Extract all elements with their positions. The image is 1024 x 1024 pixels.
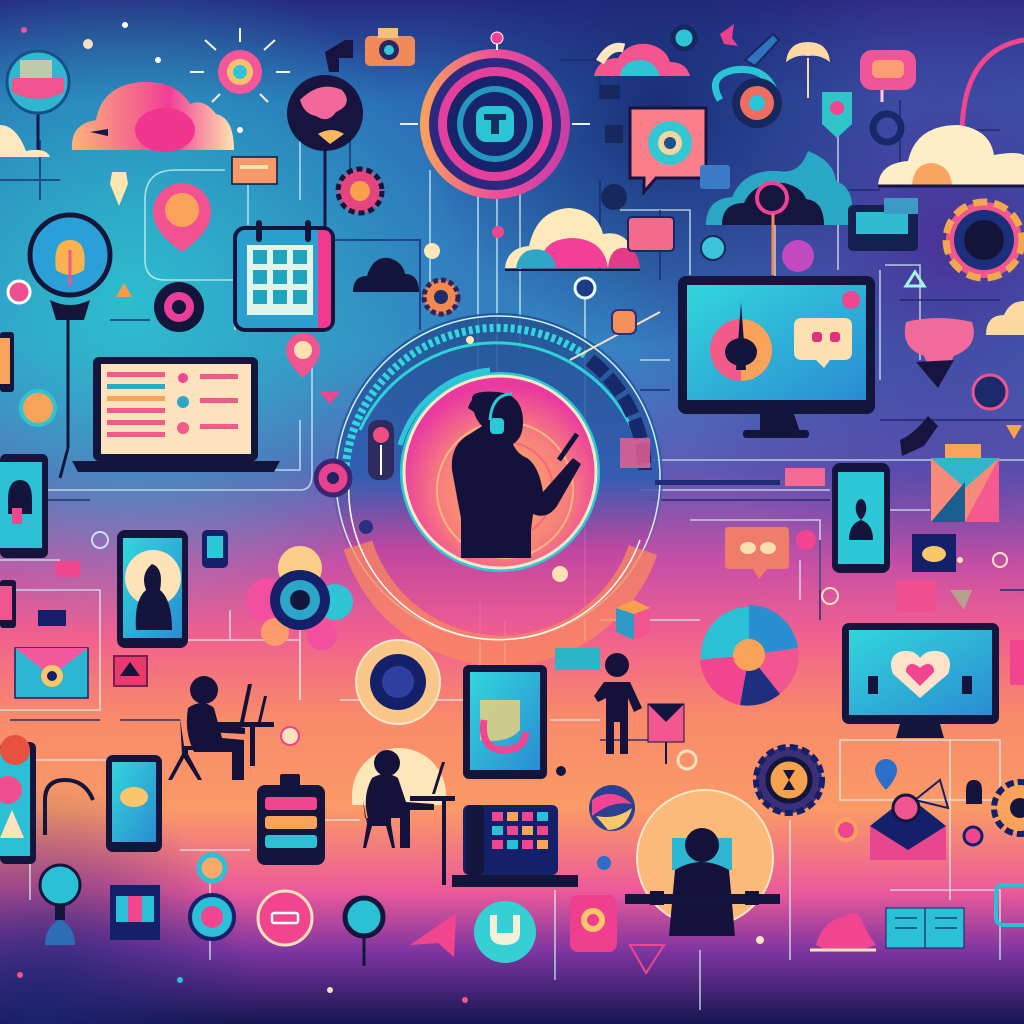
open book bbox=[886, 908, 964, 948]
small gear pink bbox=[836, 820, 856, 840]
icon: framed red bbox=[114, 656, 147, 686]
glowing orb bbox=[474, 901, 536, 963]
icon: pink small arrow bbox=[720, 24, 738, 46]
person at desk 1 bbox=[168, 676, 274, 780]
icon: orange coin bbox=[21, 391, 55, 425]
top concentric target bbox=[400, 32, 590, 199]
card device lower left bbox=[110, 885, 160, 940]
icon: small ring pin bbox=[575, 278, 595, 298]
map pin blue bbox=[875, 759, 897, 790]
central hub bbox=[333, 313, 663, 651]
monitor: lower right heart bbox=[842, 623, 999, 738]
person at desk 2 with light bbox=[352, 748, 455, 885]
icon: yellow pin bbox=[110, 172, 128, 206]
panel: speech frame bbox=[630, 108, 706, 192]
magnifier dark bbox=[345, 898, 383, 966]
ring bbox=[199, 855, 225, 881]
standing person bbox=[594, 653, 642, 754]
speech bubble right bbox=[905, 318, 974, 388]
icon: card device bbox=[848, 198, 918, 251]
icon: dark small frame bbox=[912, 534, 956, 572]
icon: small circle bbox=[8, 281, 30, 303]
phone: right center bbox=[832, 463, 890, 573]
side device on hub bbox=[368, 420, 394, 480]
robot bulb lower left bbox=[40, 865, 80, 945]
gear center bbox=[424, 280, 458, 314]
tablet: center bbox=[463, 665, 547, 779]
envelope: right bbox=[931, 444, 999, 522]
cloud: dark center right bbox=[706, 151, 852, 275]
hook arc bbox=[45, 780, 93, 835]
icon: pink bubbles bbox=[796, 530, 972, 612]
icon: swirl device bbox=[715, 69, 782, 128]
triangle outline bbox=[915, 780, 948, 808]
icon: ring bbox=[673, 27, 695, 49]
phone: lower left bbox=[106, 755, 162, 852]
cube bbox=[616, 600, 650, 640]
envelope with seal bbox=[870, 795, 946, 860]
icon: small screens top center bbox=[600, 85, 730, 210]
pink app tile bbox=[570, 895, 617, 952]
phone left edge small bbox=[0, 580, 16, 628]
icon: mail pin small bbox=[648, 704, 684, 764]
icon: top right device bbox=[860, 50, 916, 102]
silhouette: person with headset bbox=[452, 392, 581, 558]
person with laptop in glow bbox=[625, 790, 780, 936]
small pink lens left of hub bbox=[316, 461, 350, 495]
icon: dark dial bbox=[973, 375, 1007, 409]
cloud: top right cream bbox=[878, 125, 1024, 186]
icon: small dark bbox=[38, 610, 66, 626]
icon: red octopus bbox=[0, 735, 30, 765]
label tag bbox=[232, 157, 277, 184]
icon: tag left bbox=[55, 561, 80, 577]
tag: chat teal bbox=[555, 648, 600, 670]
icon: gear right bbox=[946, 202, 1022, 278]
icon: triangle outline bbox=[906, 272, 924, 286]
cloud: top-left pink bbox=[72, 82, 234, 152]
clipboard stack bbox=[257, 774, 325, 865]
bracket right bottom bbox=[996, 885, 1024, 925]
lens target bbox=[190, 895, 234, 939]
gear right edge bbox=[994, 782, 1024, 834]
arc: top right bbox=[962, 40, 1024, 130]
tablet: left edge bbox=[0, 454, 48, 558]
paper plane bbox=[410, 913, 456, 957]
icon: map pin bbox=[822, 92, 852, 138]
pie wheel bbox=[700, 605, 799, 706]
cloud: upper center small bbox=[594, 44, 690, 76]
small dark plug bbox=[966, 780, 982, 804]
dark cloud small bbox=[353, 258, 419, 292]
swirl badge bbox=[589, 785, 635, 831]
icon: dark globe on stem bbox=[287, 75, 363, 245]
icon: small dark plug bbox=[900, 416, 938, 456]
orbit link line bbox=[570, 312, 660, 360]
calendar bbox=[235, 220, 333, 330]
laptop: left bbox=[72, 357, 280, 472]
cloud: center rainbow bbox=[505, 208, 640, 270]
target flower bbox=[246, 546, 353, 650]
icon: blue balls bbox=[701, 236, 814, 272]
cloud: left edge bbox=[0, 125, 50, 157]
cloud: right edge bbox=[986, 301, 1024, 335]
envelope: left bbox=[15, 648, 88, 698]
phone: left silhouette bbox=[117, 530, 188, 648]
icon: sun ring bbox=[190, 28, 290, 102]
device small phone bbox=[202, 530, 228, 568]
icon: small tag bbox=[325, 40, 353, 72]
data rows right of hub bbox=[620, 438, 825, 486]
lightbulb bbox=[30, 215, 110, 478]
lens ring center-bottom bbox=[356, 640, 440, 724]
icon: camera bbox=[365, 28, 415, 66]
pin: small bbox=[286, 333, 320, 378]
icon: dark lens bbox=[154, 282, 204, 332]
phone: left edge bbox=[0, 332, 14, 392]
icon: message panel small bbox=[628, 217, 674, 251]
gear small top bbox=[338, 169, 382, 213]
icon: small top-left globe bbox=[7, 51, 69, 150]
chat bubble pink bbox=[725, 527, 789, 579]
icon: pink edge bbox=[1010, 640, 1024, 685]
icon: umbrella bbox=[786, 42, 830, 98]
triangle orange right bbox=[1006, 425, 1022, 439]
triangle outline bbox=[630, 945, 664, 973]
icon: orange chip bbox=[612, 310, 636, 334]
icon: satellite bbox=[745, 34, 779, 66]
icon: knot bbox=[873, 114, 901, 142]
left lower device bbox=[0, 742, 36, 864]
pin: pink balloon bbox=[153, 183, 211, 252]
desk phone bbox=[452, 805, 578, 887]
gear target lower right bbox=[756, 747, 822, 813]
pink button bbox=[258, 891, 312, 945]
pink ship figure bbox=[810, 913, 876, 950]
monitor: upper right bbox=[678, 276, 875, 438]
dark circuit lines bbox=[0, 60, 1024, 740]
